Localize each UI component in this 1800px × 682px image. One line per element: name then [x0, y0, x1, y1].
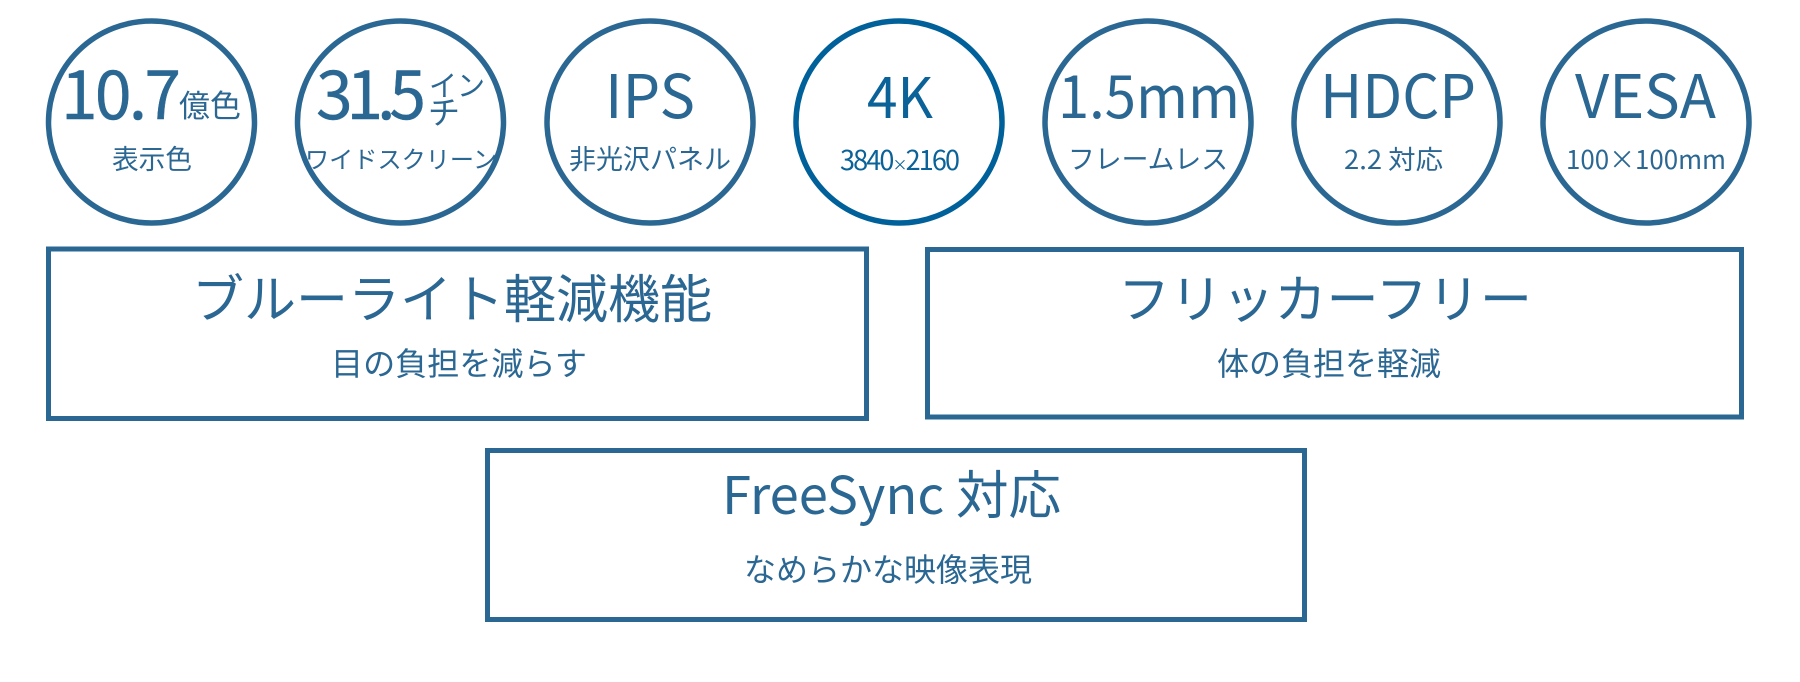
panel: blue light reduction [48, 249, 866, 418]
badge: IPS 非光沢パネル: IPS [605, 49, 695, 136]
badge: 10.7億色 表示色: 億色 [179, 81, 241, 126]
badge: HDCP 2.2対応 [1294, 21, 1500, 223]
text: reduce body strain: 体の負担を軽減 [1217, 339, 1441, 385]
badge: VESA 100×100mm [1543, 21, 1749, 223]
panel: flicker free [928, 250, 1742, 417]
badge: 31.5インチ ワイドスクリーン: 31.5 [316, 43, 426, 139]
heading: flicker free: フリッカーフリー [1118, 258, 1532, 333]
badge: VESA 100×100mm: 100×100mm [1566, 140, 1726, 177]
badge: VESA 100×100mm: VESA [1575, 49, 1717, 136]
text: smooth video: なめらかな映像表現 [744, 545, 1032, 591]
badge: 10.7億色 表示色: 10.7 [61, 43, 181, 139]
badge: IPS 非光沢パネル [547, 21, 753, 223]
badge: 10.7億色 表示色: 表示色 [112, 138, 192, 177]
badge: 31.5インチ ワイドスクリーン: イン [429, 63, 485, 105]
badge: 4K 3840×2160: 4K [867, 54, 933, 135]
badge: 1.5mm フレームレス: 1.5mm [1058, 51, 1240, 135]
badge: 31.5インチ ワイドスクリーン: チ [428, 88, 460, 134]
badge: 1.5mm フレームレス: フレームレス [1068, 138, 1228, 177]
heading: FreeSync: FreeSync 対応 [722, 454, 1061, 529]
badge: 31.5インチ ワイドスクリーン [298, 21, 504, 223]
badge: HDCP 2.2対応: HDCP [1320, 49, 1476, 136]
text: reduce eye strain: 目の負担を減らす [331, 339, 587, 385]
panel: FreeSync [488, 450, 1304, 620]
badge: 31.5インチ ワイドスクリーン: ワイドスクリーン [305, 140, 497, 175]
badge: IPS 非光沢パネル: 非光沢パネル [569, 138, 731, 177]
badge: HDCP 2.2対応: 2.2 対応 [1344, 140, 1443, 177]
badge: 4K 3840×2160: 3840×2160 [840, 139, 960, 178]
badge: 10.7億色 表示色 [48, 21, 254, 223]
badge: 4K 3840×2160 [796, 21, 1002, 223]
badge: 1.5mm フレームレス [1045, 21, 1251, 223]
heading: blue light: ブルーライト軽減機能 [192, 258, 712, 333]
